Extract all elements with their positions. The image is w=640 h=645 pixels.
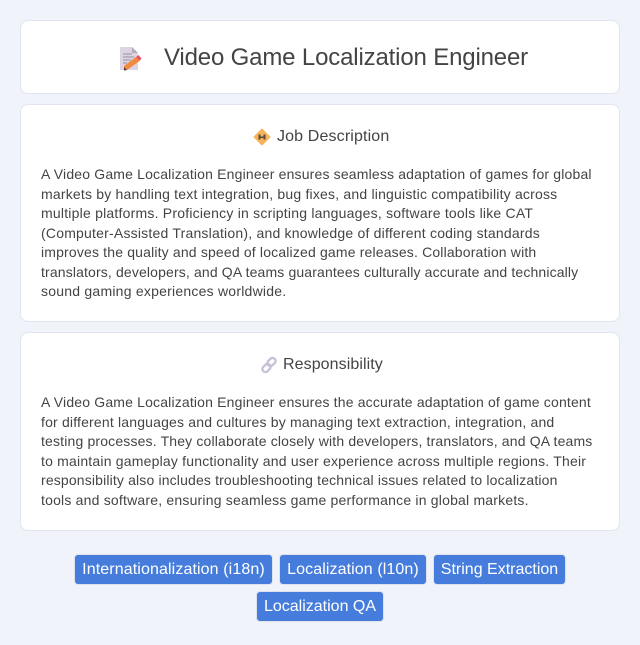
heading: job description: Job Description	[277, 128, 389, 145]
text: responsibility body: tools and software, ensuring seamless game performance in global markets.	[41, 492, 529, 508]
text: responsibility body: responsibility also includes troubleshooting technical issues related to localization	[41, 472, 558, 488]
text: job description body: A Video Game Localization Engineer ensures seamless adaptation of games for global	[41, 166, 592, 182]
text: job description body: markets by handling text integration, bug fixes, and linguistic compatibility across	[41, 186, 557, 202]
text: job description body	[41, 166, 592, 299]
heading: title text: Video Game Localization Engineer	[164, 44, 528, 71]
tag: Localization QA	[256, 591, 384, 622]
tag: String Extraction	[433, 554, 566, 585]
text: responsibility body: for different languages and cultures by managing text extraction, integration, and	[41, 414, 554, 430]
icon: chain link	[261, 356, 277, 374]
tag: String Extraction: String Extraction	[441, 561, 558, 578]
panel: responsibility	[20, 332, 620, 531]
text: job description body: (Computer-Assisted Translation), and knowledge of different coding standards	[41, 224, 540, 240]
tag: Internationalization: Internationalization (i18n)	[82, 561, 265, 578]
tag: Localization: Localization (l10n)	[287, 561, 419, 578]
icon: document with pencil	[120, 47, 142, 70]
heading: responsibility: Responsibility	[283, 356, 383, 373]
text: job description body: translators, developers, and QA teams guarantees culturally accurate and technically	[41, 264, 578, 280]
text: job description body: multiple platforms. Proficiency in scripting languages, software tools like CAT	[41, 205, 533, 221]
tag: Localization QA: Localization QA	[264, 598, 376, 615]
text: responsibility body: testing processes. They collaborate closely with developers, translators, and QA teams	[41, 433, 592, 449]
icon: diamond sign	[254, 128, 270, 146]
text: responsibility body: to maintain gameplay functionality and user experience across multiple regions. Their	[41, 452, 586, 468]
text: job description body: sound gaming experiences worldwide.	[41, 283, 286, 299]
text: responsibility body	[41, 394, 592, 508]
tag: Internationalization	[74, 554, 273, 585]
text: job description body: improves the quality and speed of localized game releases. Collaboration with	[41, 244, 536, 260]
text: responsibility body: A Video Game Localization Engineer ensures the accurate adaptation of game content	[41, 394, 591, 410]
panel: job description	[20, 104, 620, 322]
panel: title	[20, 20, 620, 94]
tag: Localization	[279, 554, 427, 585]
